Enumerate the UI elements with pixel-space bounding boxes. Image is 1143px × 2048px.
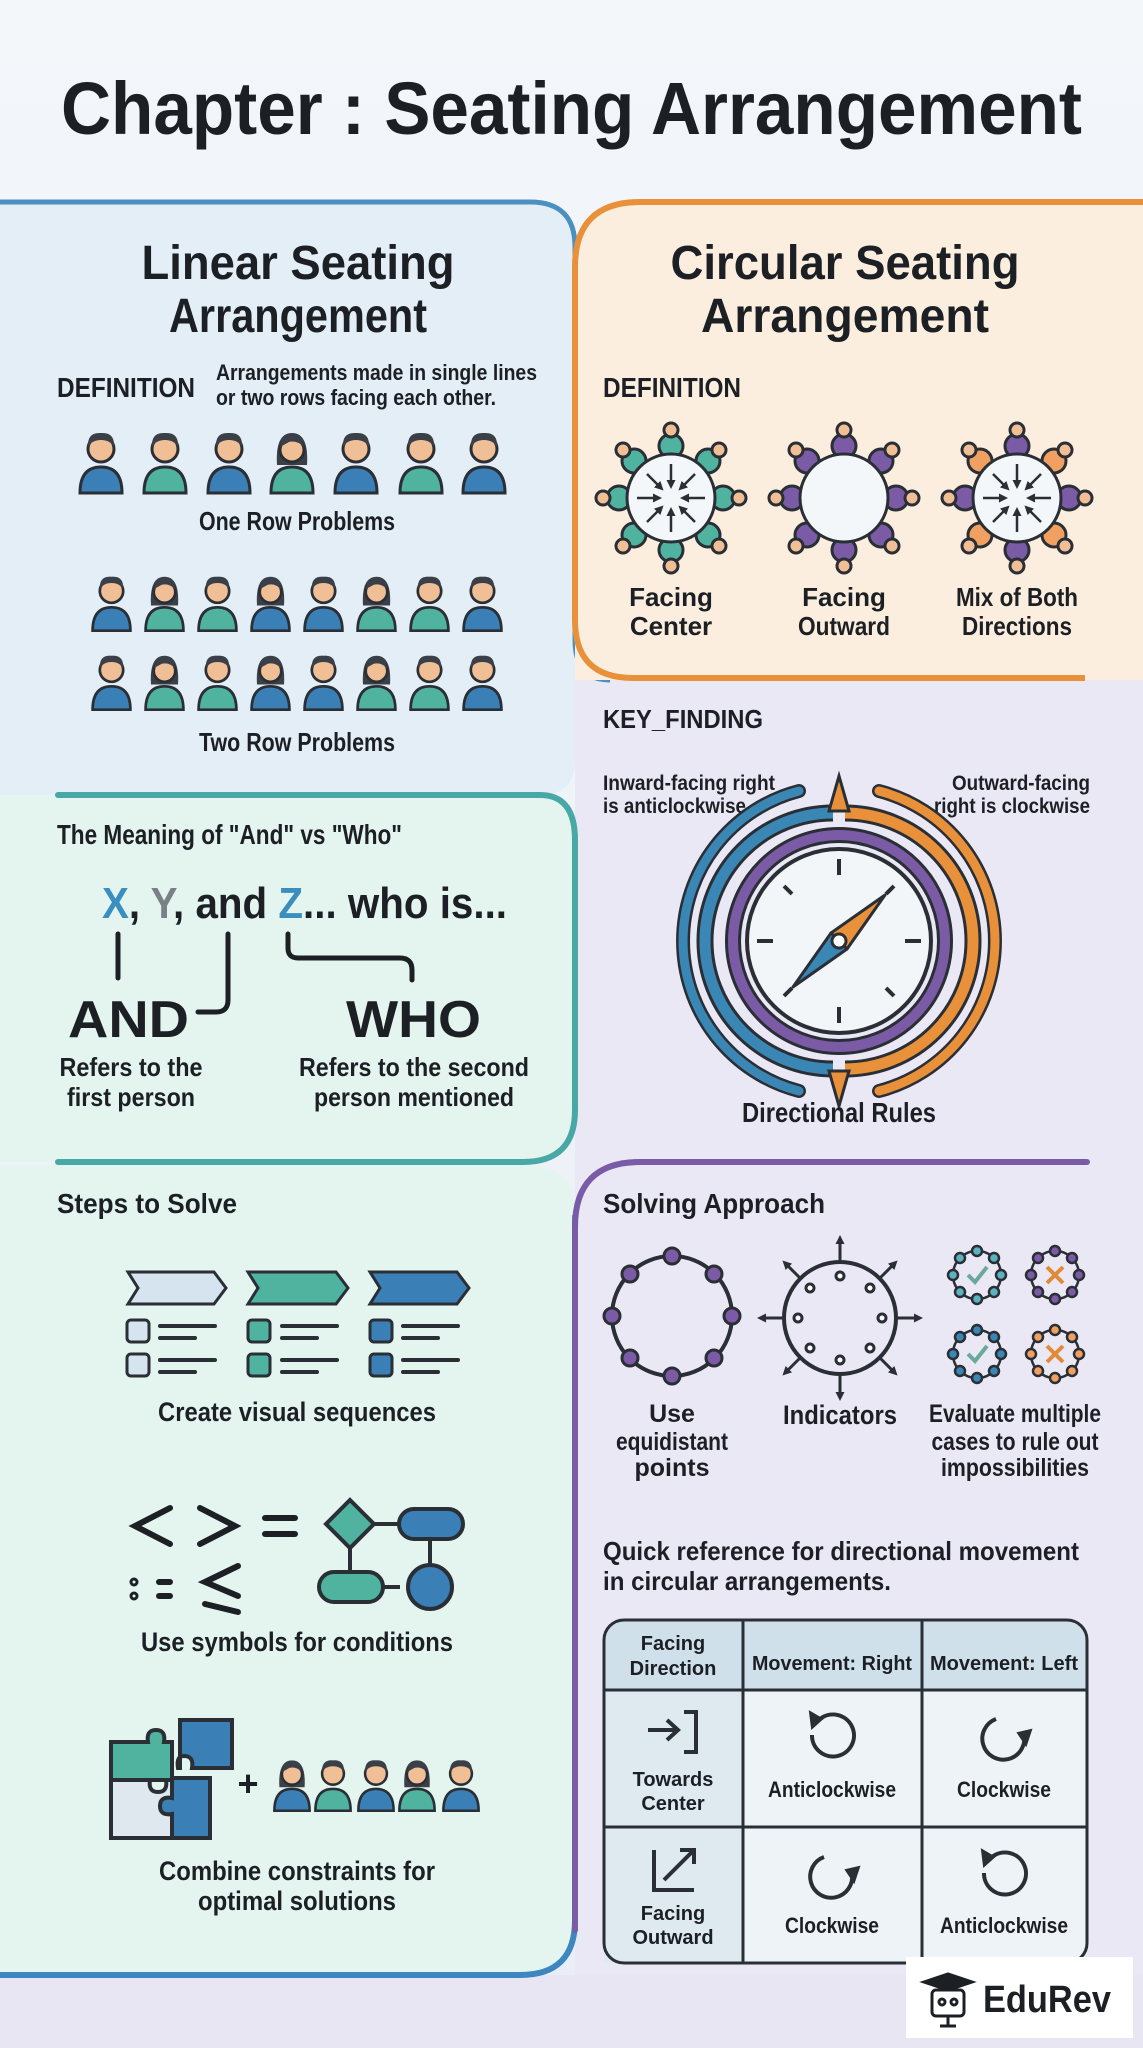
definition label: DEFINITION (603, 372, 741, 403)
table: directional movement (604, 1620, 1087, 1963)
logo: EduRev (906, 1957, 1133, 2038)
labels: approach items: equidistant (616, 1428, 729, 1456)
text: outward rule: right is clockwise (934, 795, 1090, 818)
row: facing outward: Facing (641, 1903, 705, 1925)
labels: circular types: Facing (802, 582, 886, 612)
text: inward rule: is anticlockwise (603, 795, 746, 818)
definition text: or two rows facing each other. (216, 385, 496, 410)
labels: approach items: Indicators (783, 1400, 897, 1430)
text: inward rule: Inward-facing right (603, 772, 775, 795)
heading: and vs who: The Meaning of "And" vs "Who" (57, 819, 402, 850)
label: visual sequences: Create visual sequences (158, 1397, 436, 1427)
text: who meaning (299, 1052, 529, 1112)
labels: approach items (616, 1400, 1101, 1482)
icon: indicators (762, 1240, 918, 1396)
sentence: X, Y, and Z... who is... (102, 879, 507, 928)
heading: linear: Arrangement (169, 290, 427, 343)
labels: circular types: Outward (798, 611, 890, 641)
definition text (216, 360, 537, 410)
header row: Facing (641, 1633, 705, 1655)
panel: linear seating (0, 202, 610, 795)
row: facing outward: Outward (632, 1927, 714, 1949)
row: towards center (633, 1712, 1051, 1815)
row: towards center: Towards (633, 1769, 713, 1791)
row: facing outward (632, 1850, 1068, 1949)
logo: EduRev: EduRev (983, 1979, 1111, 2021)
definition text: Arrangements made in single lines (216, 360, 537, 385)
panel: solving approach (575, 1162, 1101, 1963)
text: who meaning: person mentioned (314, 1082, 514, 1112)
panel: circular seating (575, 202, 1143, 680)
text: quick reference (603, 1536, 1079, 1596)
title: Chapter : Seating Arrangement (61, 67, 1082, 150)
label: AND: AND (68, 991, 189, 1049)
row: facing outward: Anticlockwise (940, 1913, 1068, 1938)
heading: solving approach: Solving Approach (603, 1188, 825, 1219)
definition label: DEFINITION (57, 372, 195, 403)
heading: linear (142, 237, 454, 343)
label: symbols: Use symbols for conditions (141, 1627, 453, 1657)
panel: and vs who (0, 795, 575, 1162)
text: quick reference: Quick reference for directional movement (603, 1536, 1079, 1566)
labels: approach items: impossibilities (941, 1454, 1089, 1482)
header row: Direction (630, 1658, 716, 1680)
icon: equidistant points (604, 1248, 740, 1384)
text: and meaning: first person (67, 1082, 195, 1112)
header row: Movement: Left (930, 1653, 1078, 1675)
heading: linear: Linear Seating (142, 237, 454, 290)
icon: puzzle plus people: + (237, 1763, 259, 1804)
row: towards center: Clockwise (957, 1777, 1051, 1802)
labels: approach items: Evaluate multiple (929, 1400, 1101, 1428)
icon: one row people (80, 433, 505, 493)
text: quick reference: in circular arrangements. (603, 1566, 891, 1596)
labels: circular types: Center (630, 611, 712, 641)
row: facing outward: Clockwise (785, 1913, 879, 1938)
icon: evaluate cases (948, 1246, 1084, 1383)
text: who meaning: Refers to the second (299, 1052, 529, 1082)
labels: approach items: Use (649, 1400, 695, 1428)
icon: puzzle plus people (111, 1720, 479, 1838)
panel: key finding (603, 704, 1090, 1128)
icon: compass (683, 776, 995, 1106)
text: outward rule (934, 772, 1090, 818)
label: key finding: KEY_FINDING (603, 704, 763, 734)
label: two row: Two Row Problems (199, 727, 395, 757)
text: and meaning: Refers to the (60, 1052, 202, 1082)
icon: facing center (596, 423, 746, 573)
icon: symbols and flowchart (132, 1500, 463, 1612)
label: one row: One Row Problems (199, 506, 395, 536)
labels: approach items: cases to rule out (932, 1428, 1099, 1456)
labels: circular types: Mix of Both (956, 582, 1078, 612)
label: combine constraints: optimal solutions (198, 1886, 396, 1916)
label: combine constraints: Combine constraints for (159, 1856, 435, 1886)
header row: Movement: Right (752, 1653, 912, 1675)
text: and meaning (60, 1052, 202, 1112)
text: inward rule (603, 772, 775, 818)
text: outward rule: Outward-facing (952, 772, 1090, 795)
header row (630, 1633, 1078, 1680)
heading: steps: Steps to Solve (57, 1188, 237, 1219)
icon: two row people (93, 577, 501, 710)
heading: circular (670, 237, 1020, 343)
icon: mixed (942, 423, 1092, 573)
panel: steps to solve (0, 1165, 575, 1975)
row: towards center: Anticlockwise (768, 1777, 896, 1802)
label: WHO: WHO (346, 991, 481, 1049)
connectors (118, 934, 412, 1012)
labels: approach items: points (634, 1454, 710, 1482)
row: towards center: Center (641, 1793, 705, 1815)
icon: facing outward (769, 423, 919, 573)
label: combine constraints (159, 1856, 435, 1916)
heading: circular: Circular Seating (670, 237, 1020, 290)
labels: circular types: Directions (962, 611, 1072, 641)
label: directional rules: Directional Rules (742, 1097, 936, 1128)
heading: circular: Arrangement (701, 290, 989, 343)
labels: circular types: Facing (629, 582, 713, 612)
icon: visual sequences (127, 1272, 469, 1376)
labels: circular types (629, 582, 1078, 641)
